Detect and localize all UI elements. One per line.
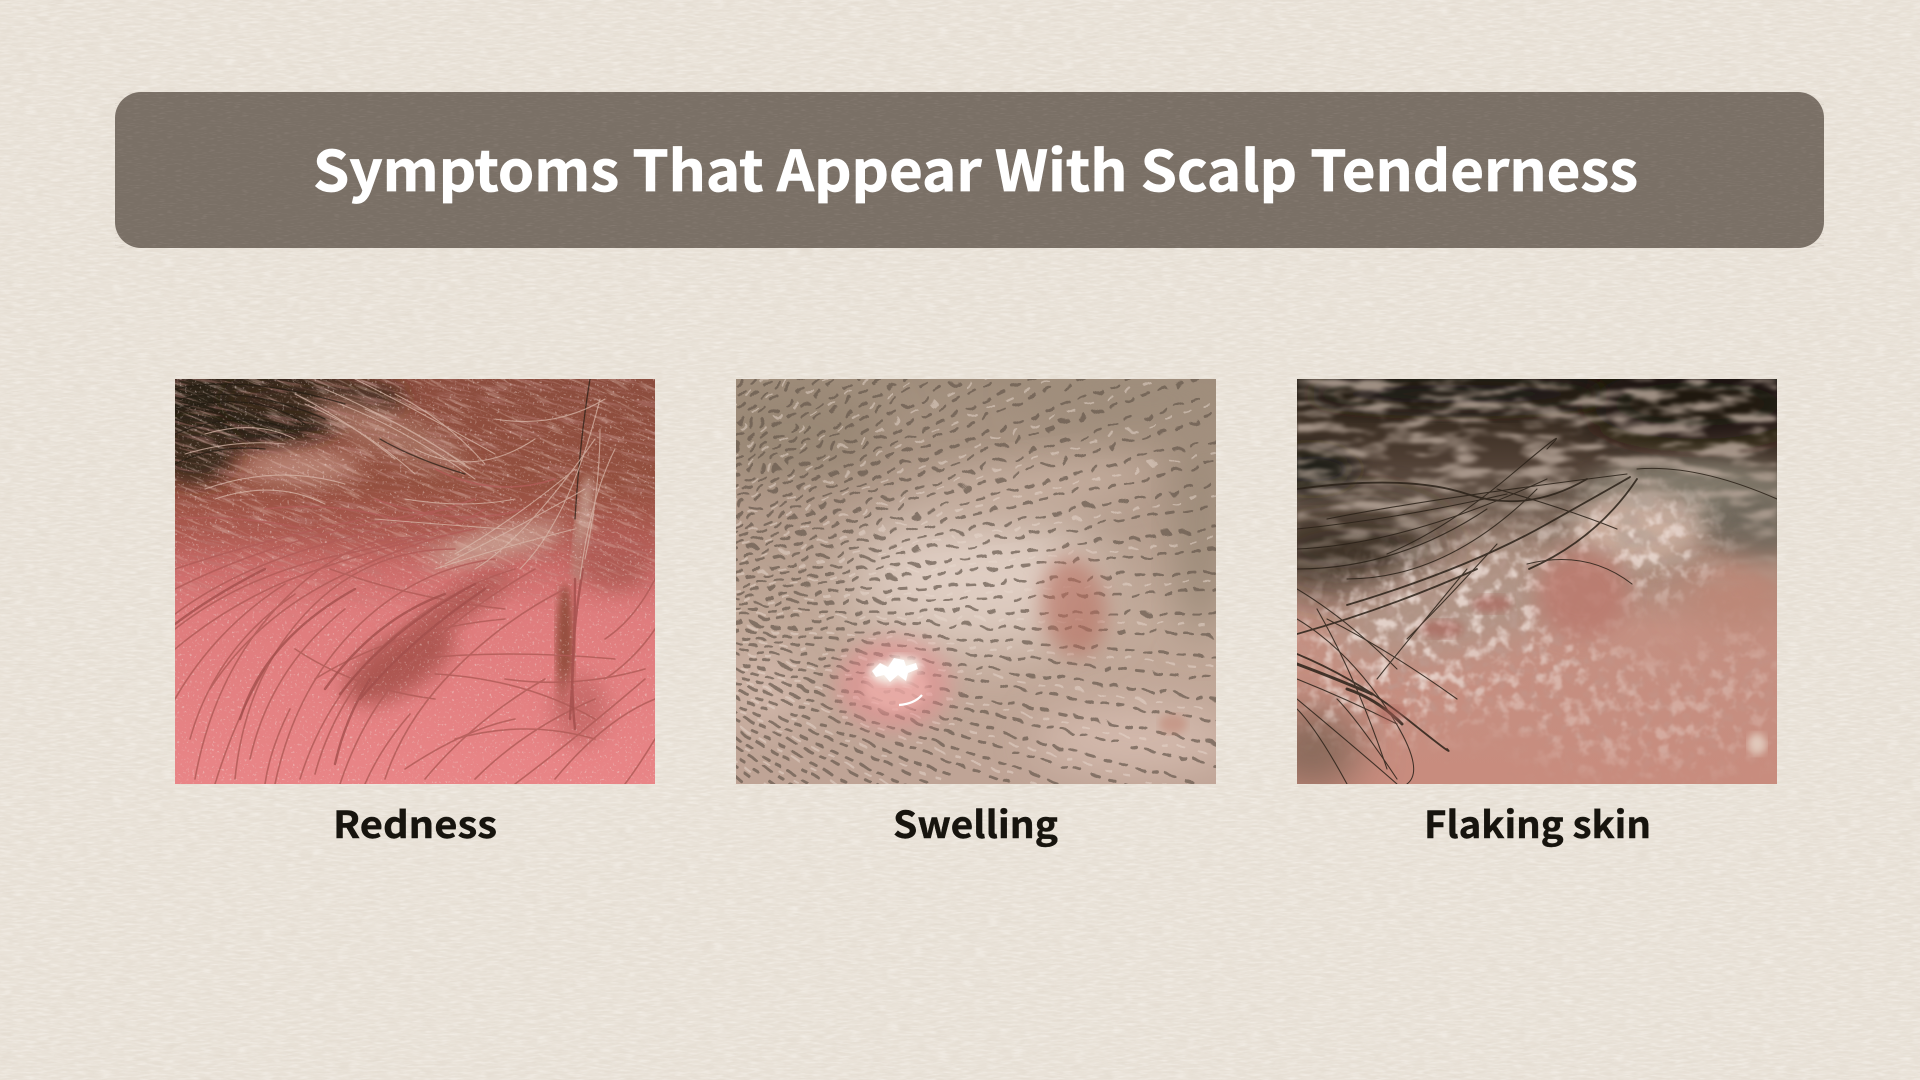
pale strands xyxy=(185,379,615,579)
dark hair on top xyxy=(175,379,590,519)
red flecks xyxy=(1378,595,1512,722)
inflamed bump xyxy=(836,638,952,730)
caption: Swelling: Swelling xyxy=(893,795,1058,849)
title banner xyxy=(115,92,1824,248)
photo: flaking skin xyxy=(1297,379,1777,784)
follicle dashes xyxy=(736,379,1216,784)
caption: Redness: Redness xyxy=(333,795,497,849)
red patch xyxy=(1035,553,1113,661)
hair strands xyxy=(175,469,655,784)
title: Symptoms That Appear With Scalp Tenderness xyxy=(313,127,1638,208)
caption: Flaking skin: Flaking skin xyxy=(1424,795,1651,849)
photo: redness of scalp with hair xyxy=(175,379,655,784)
photo: swelling with inflamed bump xyxy=(736,379,1216,784)
hair strands xyxy=(1297,438,1777,784)
